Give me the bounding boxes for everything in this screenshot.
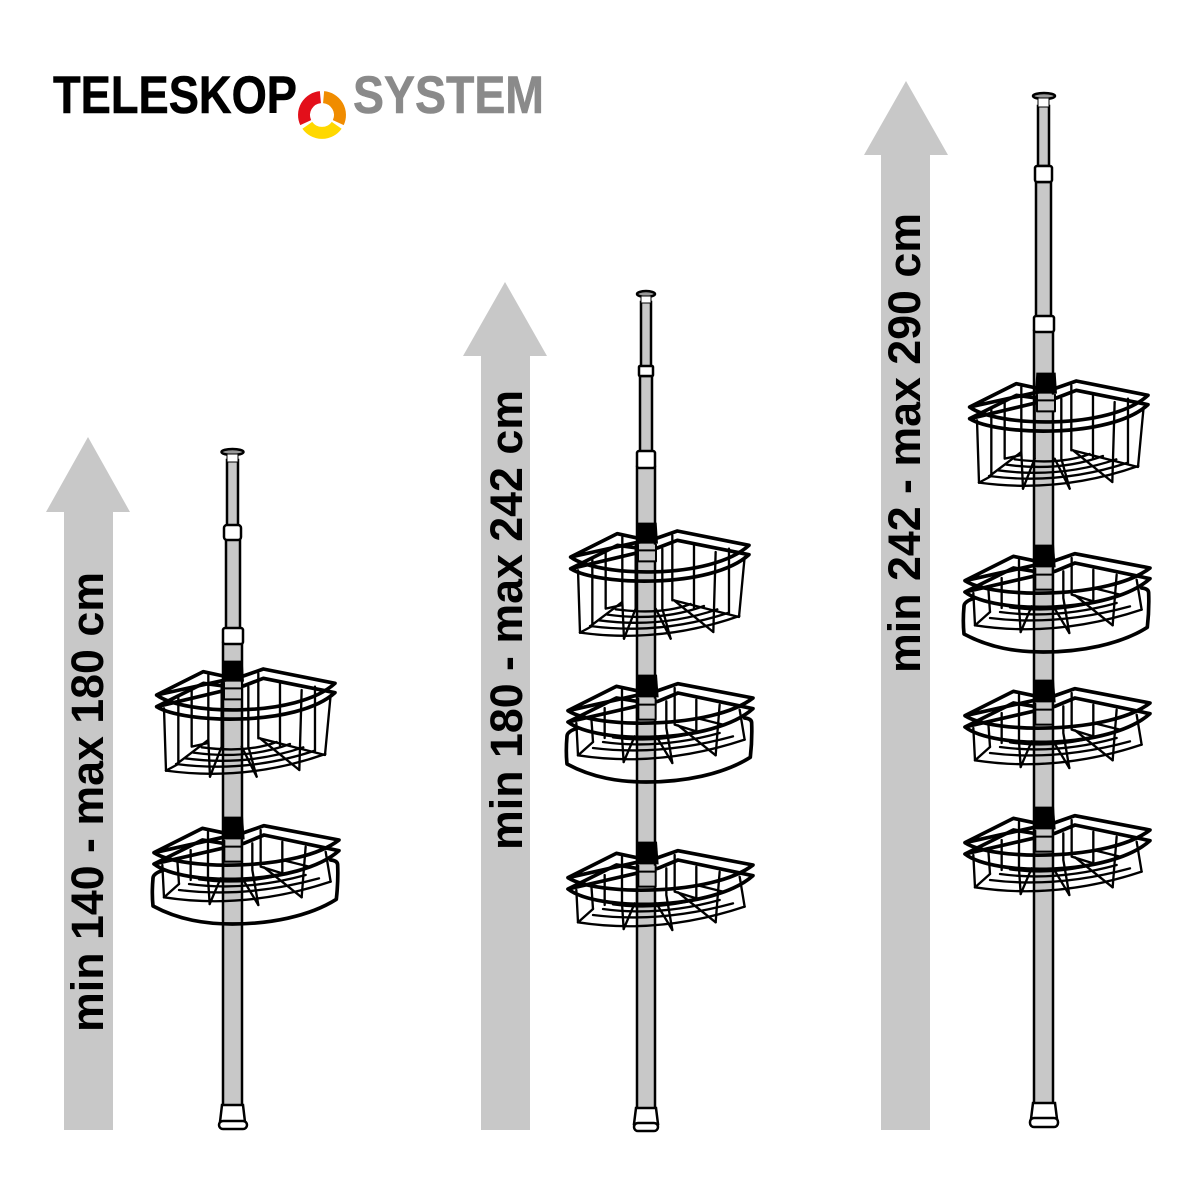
basket: third — [965, 680, 1150, 768]
title: Teleskop System logo — [53, 66, 544, 133]
label: min 180 - max 242 cm: min 180 - max 242 cm — [481, 390, 532, 850]
basket: second with tray — [963, 545, 1150, 652]
shelf unit: two baskets on short pole — [152, 449, 339, 1129]
arrow: height range 180-242 cm — [463, 282, 547, 1130]
logo icon: tricolour ring — [304, 97, 340, 133]
basket: lower with tray — [152, 817, 339, 924]
telescopic pole — [634, 291, 658, 1131]
basket: middle with tray — [566, 675, 753, 782]
basket: upper tall — [157, 661, 335, 777]
arrow: height range 242-290 cm — [864, 81, 948, 1130]
basket: top tall — [970, 373, 1148, 489]
basket: lower — [568, 842, 753, 930]
shelf unit: three baskets on medium pole — [566, 291, 753, 1131]
label: min 140 - max 180 cm: min 140 - max 180 cm — [62, 572, 113, 1032]
telescopic pole — [1030, 93, 1058, 1127]
basket: bottom — [965, 807, 1150, 895]
arrow: height range 140-180 cm — [46, 437, 130, 1130]
basket: upper tall — [571, 523, 749, 639]
label: min 242 - max 290 cm: min 242 - max 290 cm — [879, 213, 930, 673]
shelf unit: four baskets on long pole — [963, 93, 1150, 1127]
logo word: SYSTEM: SYSTEM — [353, 66, 544, 125]
logo word: TELESKOP: TELESKOP — [53, 66, 297, 125]
telescopic pole — [219, 449, 247, 1129]
